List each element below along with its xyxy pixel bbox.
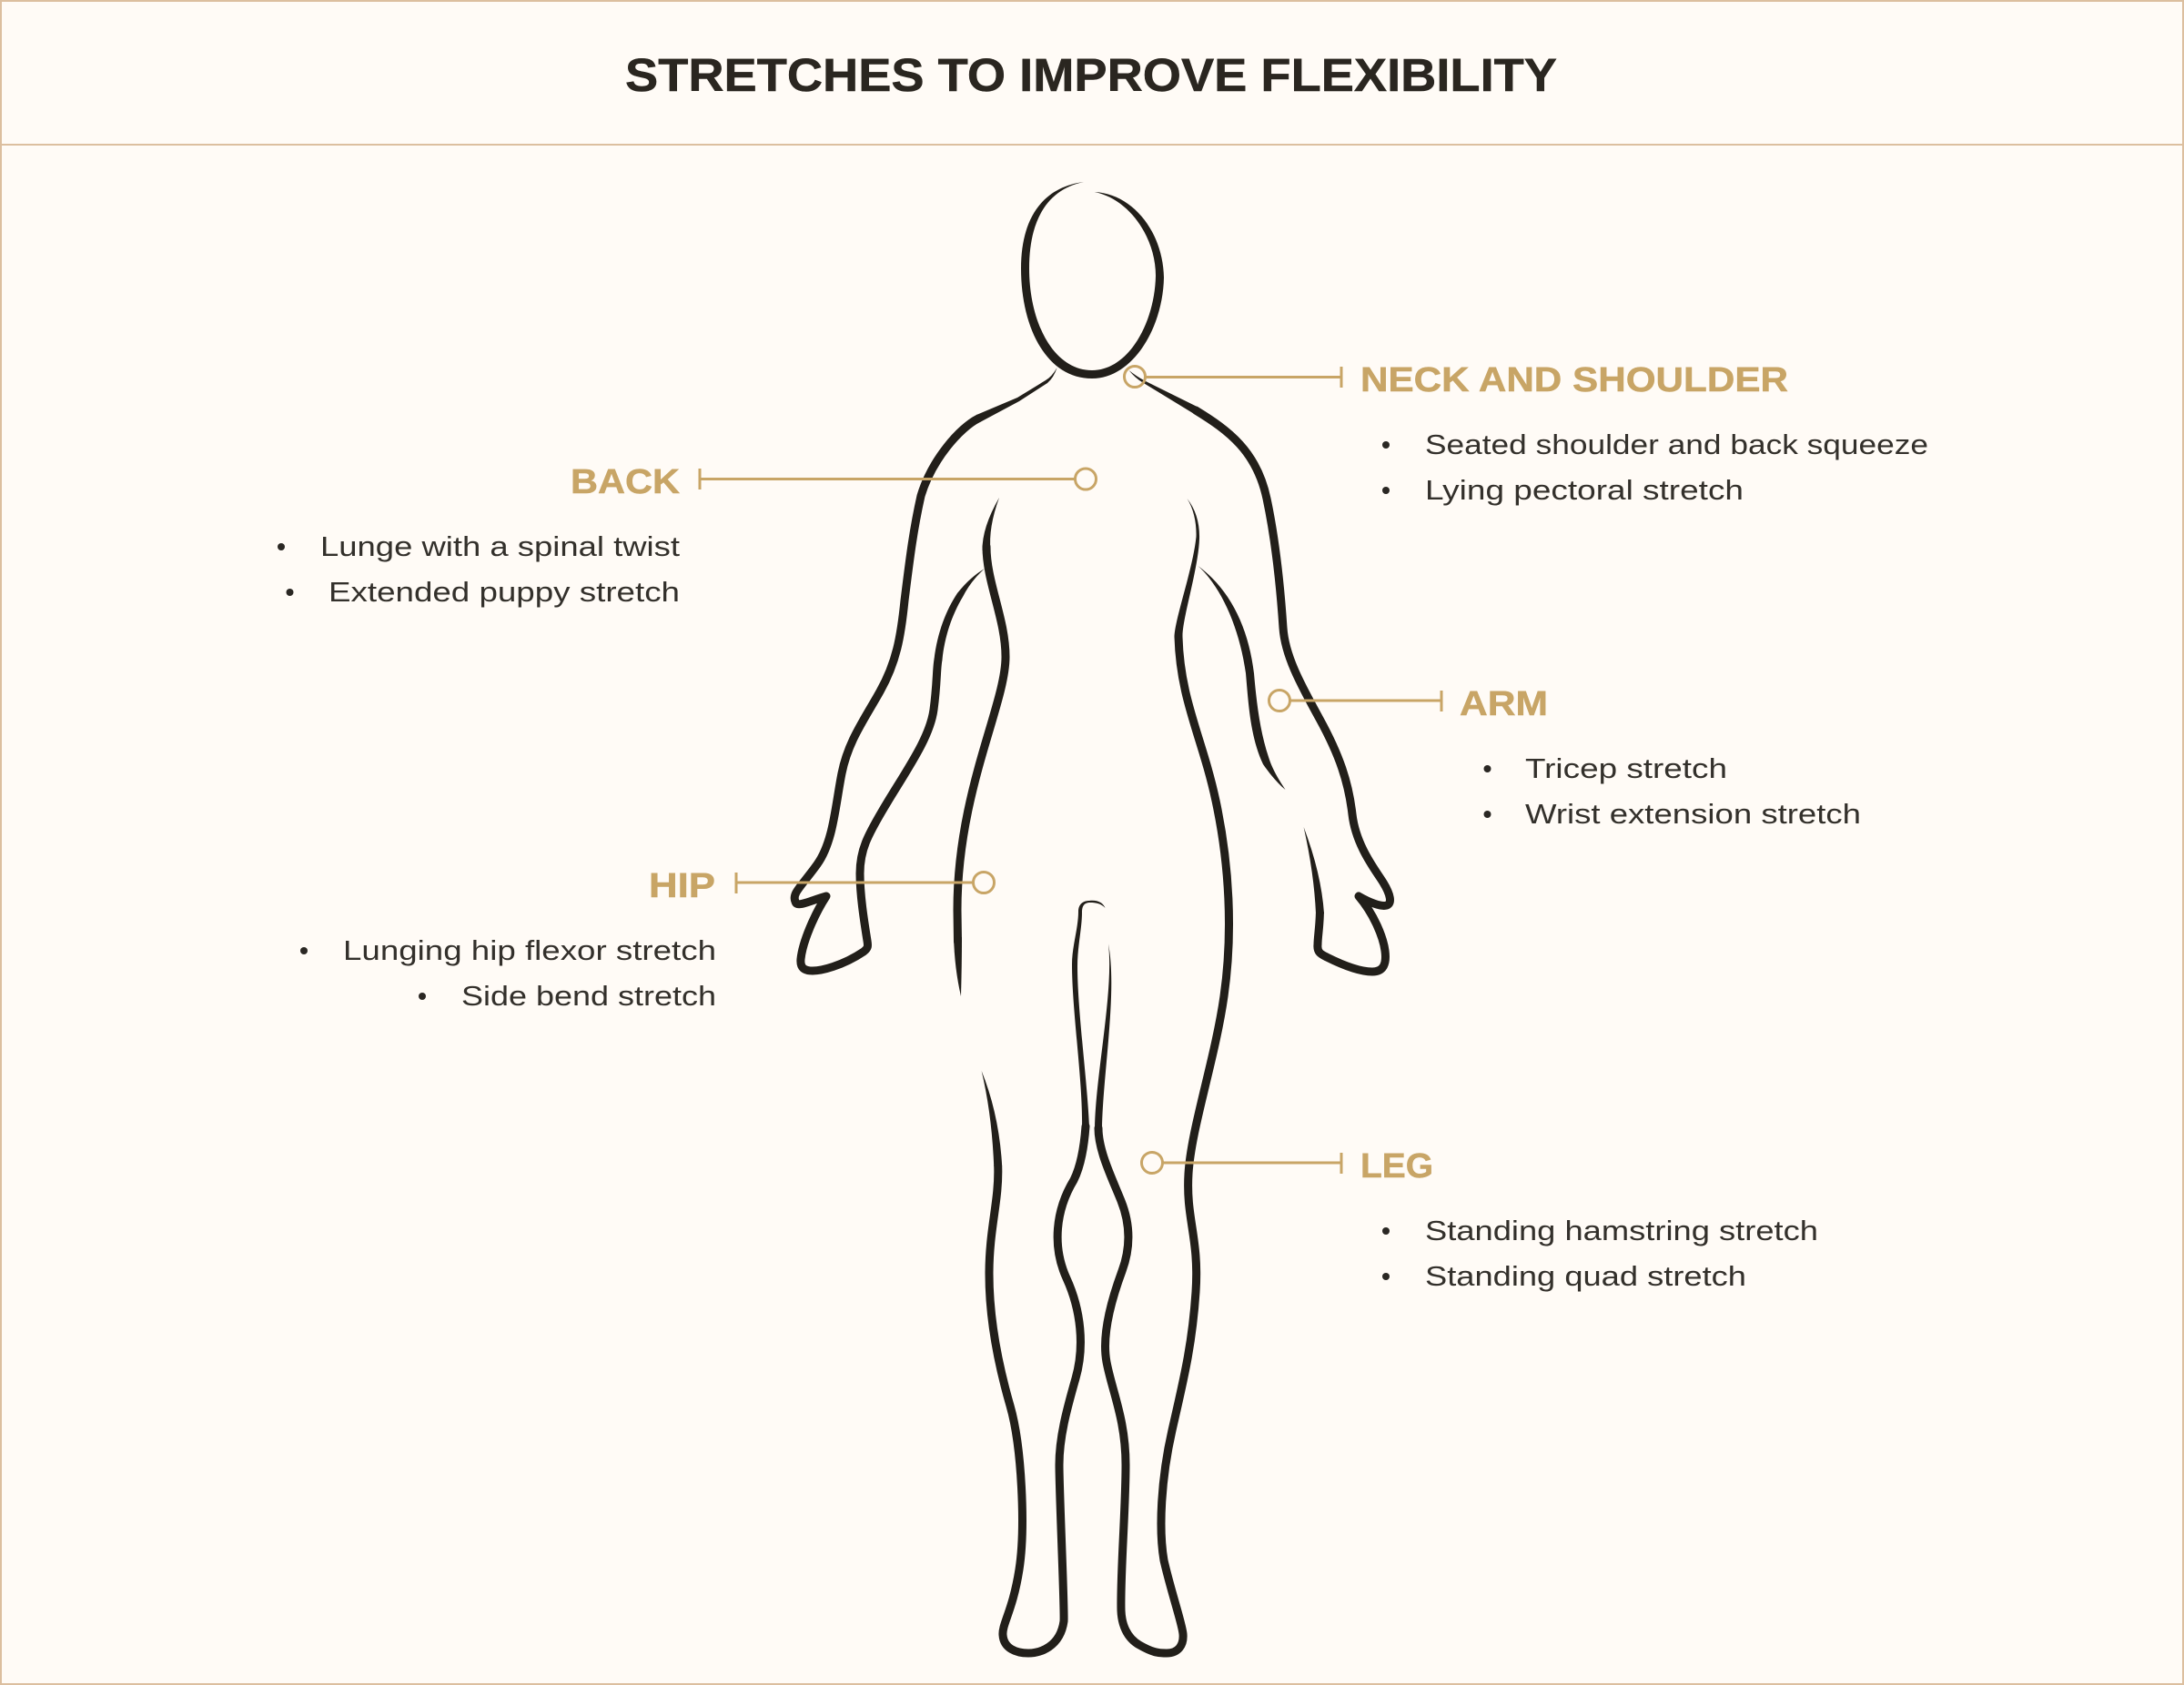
right leg and torso line (1095, 499, 1229, 1653)
list: leg: Standing hamstring stretch (1425, 1215, 1818, 1246)
right arm and shoulder (1129, 370, 1390, 972)
title: STRETCHES TO IMPROVE FLEXIBILITY (625, 49, 1557, 101)
connector: arm (1269, 690, 1441, 711)
list: neck and shoulder (1382, 429, 1928, 506)
connector: neck and shoulder (1125, 366, 1341, 388)
connector: hip (736, 872, 994, 893)
list: neck and shoulder: Lying pectoral stretch (1425, 474, 1744, 506)
left leg (982, 901, 1105, 1653)
list: hip (300, 934, 716, 1012)
callout: arm (1269, 685, 1861, 830)
list: back: Extended puppy stretch (329, 576, 680, 608)
callout: hip (300, 867, 994, 1012)
heading: neck and shoulder: NECK AND SHOULDER (1360, 361, 1788, 399)
list: leg: Standing quad stretch (1425, 1260, 1746, 1292)
list: hip: Side bend stretch (461, 980, 716, 1012)
connector: leg (1141, 1152, 1341, 1174)
list: arm: Tricep stretch (1525, 752, 1727, 784)
list: arm (1483, 752, 1861, 830)
head outline (1021, 182, 1164, 378)
connector: back (700, 469, 1096, 489)
callout: neck and shoulder (1125, 361, 1928, 506)
right inner arm line (1198, 566, 1285, 790)
heading: hip: HIP (649, 867, 715, 905)
callout: back (278, 463, 1096, 608)
list: leg (1382, 1215, 1818, 1292)
list: neck and shoulder: Seated shoulder and back squeeze (1425, 429, 1928, 460)
left arm and shoulder (794, 368, 1057, 971)
heading: back: BACK (571, 463, 681, 501)
list: arm: Wrist extension stretch (1525, 798, 1861, 830)
list: back (278, 530, 680, 608)
heading: leg: LEG (1360, 1147, 1433, 1186)
list: hip: Lunging hip flexor stretch (343, 934, 716, 966)
list: back: Lunge with a spinal twist (320, 530, 680, 562)
body outline figure (794, 182, 1390, 1653)
heading: arm: ARM (1460, 685, 1548, 723)
callout: leg (1141, 1147, 1818, 1292)
left torso line (954, 498, 1006, 996)
